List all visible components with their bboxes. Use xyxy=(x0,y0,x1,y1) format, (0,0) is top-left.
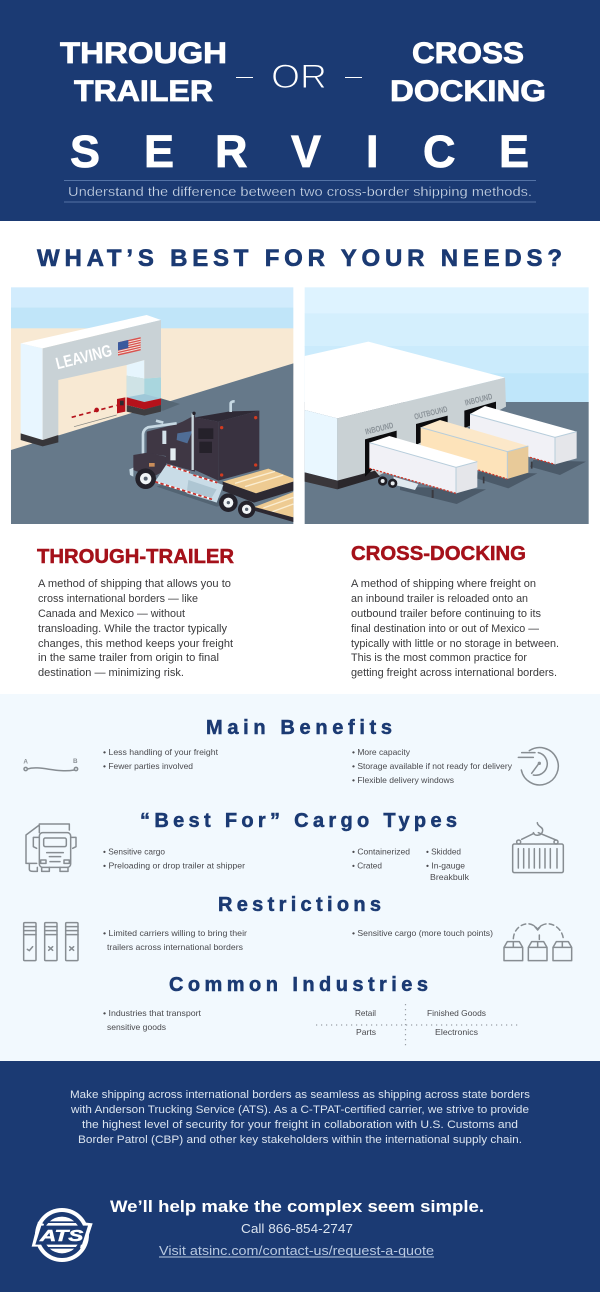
icon: timer xyxy=(518,748,558,785)
block: through-trailer description: Canada and Mexico — without xyxy=(38,608,185,620)
list: cross-docking benefits xyxy=(352,747,513,785)
list: through-trailer restrictions: trailers across international borders xyxy=(107,942,243,952)
logo: ATS xyxy=(32,1208,93,1262)
block: cross-docking description: CROSS-DOCKING xyxy=(351,543,526,565)
list: through-trailer restrictions: • Limited carriers willing to bring their xyxy=(103,928,247,938)
title: cross docking: DOCKING xyxy=(390,75,546,108)
block: through-trailer description: destination — minimizing risk. xyxy=(38,667,184,679)
footer paragraph: the highest level of security for your freight in collaboration with U.S. Customs and xyxy=(82,1119,518,1131)
list: cross-docking benefits: • Storage available if not ready for delivery xyxy=(352,761,513,771)
guard booth xyxy=(72,376,180,427)
grid: cross-docking industries: Finished Goods xyxy=(427,1008,486,1018)
list: cross-docking cargo: Breakbulk xyxy=(430,872,470,882)
illustration: cross-docking warehouse xyxy=(305,287,589,524)
block: through-trailer description: THROUGH-TRAILER xyxy=(37,546,235,568)
heading: restrictions: Restrictions xyxy=(218,894,381,916)
truck xyxy=(129,401,259,518)
list: through-trailer cargo: • Preloading or drop trailer at shipper xyxy=(103,860,245,870)
icon: a to b route: B xyxy=(73,758,78,765)
title: through trailer: THROUGH xyxy=(60,37,227,70)
heading: best for cargo types: “Best For” Cargo Types xyxy=(140,810,457,832)
border arch xyxy=(21,315,161,446)
title: cross docking: CROSS xyxy=(412,37,524,70)
trailer: inbound front xyxy=(369,436,486,504)
icon: boxes with touch points xyxy=(504,924,572,961)
title: or xyxy=(236,58,362,96)
trailer: outbound tan xyxy=(421,420,537,488)
icon: bottles with check marks xyxy=(24,923,78,961)
list: through-trailer benefits: • Less handling of your freight xyxy=(103,747,219,757)
icon: truck xyxy=(26,824,76,871)
heading: main benefits: Main Benefits xyxy=(206,717,392,739)
block: through-trailer description: transloading. While the tractor typically xyxy=(38,623,227,635)
list: cross-docking cargo: • Containerized xyxy=(352,846,410,856)
list: through-trailer industries: sensitive goods xyxy=(107,1022,166,1032)
title: cross docking xyxy=(390,37,546,108)
footer paragraph xyxy=(70,1089,531,1146)
grid: cross-docking industries xyxy=(316,1004,518,1046)
block: through-trailer description: A method of shipping that allows you to xyxy=(38,578,231,590)
heading: what's best: WHAT’S BEST FOR YOUR NEEDS? xyxy=(37,245,562,272)
block: through-trailer description: cross international borders — like xyxy=(38,593,198,605)
list: through-trailer cargo xyxy=(103,846,245,870)
footer paragraph: with Anderson Trucking Service (ATS). As a C-TPAT-certified carrier, we strive to provide xyxy=(70,1104,529,1116)
icon: hoisted container xyxy=(513,823,563,873)
title: service: SERVICE xyxy=(70,126,529,177)
block: cross-docking description: outbound trailer before continuing to its xyxy=(351,608,541,620)
block: cross-docking description: final destination into or out of Mexico — xyxy=(351,623,539,635)
call to action xyxy=(110,1197,484,1258)
list: through-trailer industries: • Industries that transport xyxy=(103,1008,202,1018)
heading: common industries: Common Industries xyxy=(169,974,428,996)
border arch: LEAVING xyxy=(54,341,114,373)
panel: comparison xyxy=(0,694,600,1061)
logo: ATS: ATS xyxy=(39,1228,84,1245)
footer paragraph: Make shipping across international borders as seamless as shipping across state borders xyxy=(70,1089,531,1101)
list: through-trailer benefits xyxy=(103,747,219,771)
call to action: Visit atsinc.com/contact-us/request-a-quote xyxy=(159,1243,434,1258)
warehouse building: INBOUND xyxy=(364,420,394,437)
block: through-trailer description xyxy=(37,546,235,679)
list: cross-docking benefits: • More capacity xyxy=(352,747,411,757)
list: cross-docking cargo xyxy=(352,846,470,882)
warehouse building xyxy=(305,342,506,489)
grid: cross-docking industries: Electronics xyxy=(435,1027,478,1037)
grid: cross-docking industries: Parts xyxy=(356,1027,376,1037)
list: through-trailer industries xyxy=(103,1008,202,1032)
title: or: OR xyxy=(271,58,327,96)
list: cross-docking restrictions: • Sensitive cargo (more touch points) xyxy=(352,928,493,938)
title: through trailer xyxy=(60,37,227,108)
footer xyxy=(0,1061,600,1292)
grid: cross-docking industries: Retail xyxy=(355,1008,376,1018)
list: cross-docking cargo: • In-gauge xyxy=(426,860,465,870)
header banner xyxy=(0,0,600,221)
illustration: through-trailer at border xyxy=(11,287,293,524)
block: cross-docking description: an inbound trailer is reloaded onto an xyxy=(351,593,528,605)
block: cross-docking description: A method of shipping where freight on xyxy=(351,578,536,590)
list: through-trailer restrictions xyxy=(103,928,247,952)
footer paragraph: Border Patrol (CBP) and other key stakeholders within the international supply chain. xyxy=(78,1134,522,1146)
block: cross-docking description: getting freight across international borders. xyxy=(351,667,557,679)
block: cross-docking description: This is the most common practice for xyxy=(351,652,527,664)
call to action: Call 866-854-2747 xyxy=(241,1222,353,1236)
list: cross-docking cargo: • Crated xyxy=(352,860,382,870)
call to action: We’ll help make the complex seem simple. xyxy=(110,1197,484,1216)
flatbed trailer xyxy=(223,469,293,522)
warehouse building: INBOUND xyxy=(464,391,493,408)
title: through trailer: TRAILER xyxy=(74,75,213,108)
subtitle: Understand the difference between two cross-border shipping methods. xyxy=(68,185,532,199)
list: cross-docking benefits: • Flexible delivery windows xyxy=(352,775,454,785)
block: through-trailer description: in the same trailer from origin to final xyxy=(38,652,219,664)
icon: a to b route xyxy=(23,758,78,771)
block: cross-docking description xyxy=(351,543,559,679)
trailer: inbound rear xyxy=(470,406,586,475)
list: cross-docking cargo: • Skidded xyxy=(426,846,461,856)
list: through-trailer benefits: • Fewer parties involved xyxy=(103,761,193,771)
list: through-trailer cargo: • Sensitive cargo xyxy=(103,846,165,856)
warehouse building: OUTBOUND xyxy=(413,404,448,422)
block: cross-docking description: typically with little or no storage in between. xyxy=(351,638,559,650)
icon: a to b route: A xyxy=(23,758,28,765)
block: through-trailer description: changes, this method keeps your freight xyxy=(38,638,233,650)
